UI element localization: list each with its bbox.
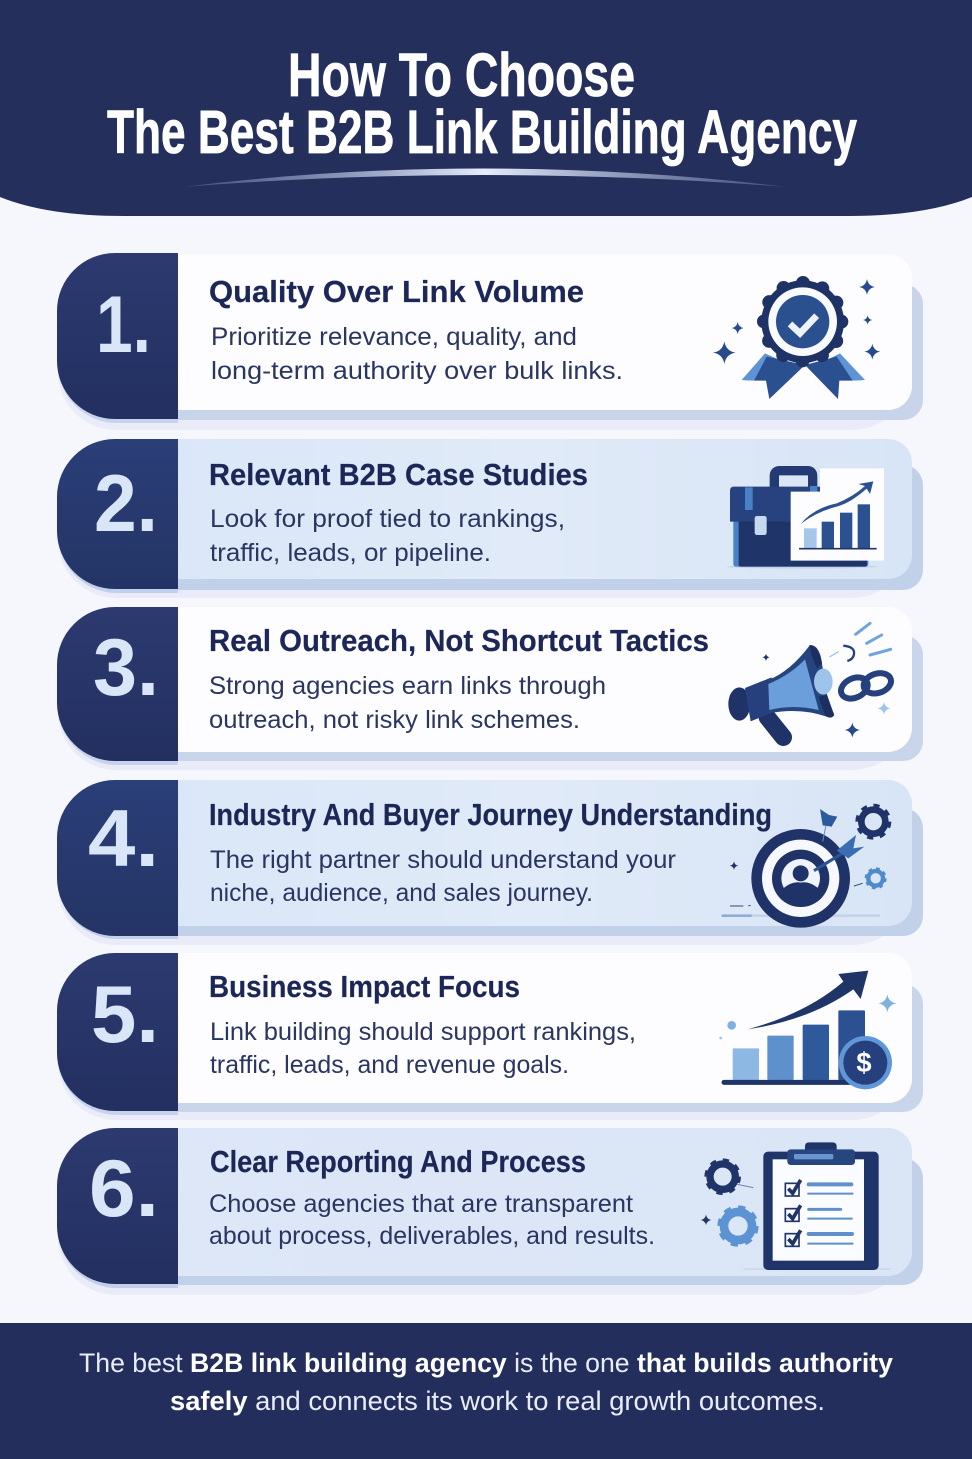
card 1 heading: Quality Over Link Volume: [209, 274, 584, 309]
card 4 description: [210, 846, 676, 907]
title swoosh: [183, 168, 787, 187]
card 4 description: niche, audience, and sales journey.: [210, 879, 593, 907]
card 2 description: [210, 505, 565, 567]
card 4 number: 4.: [88, 794, 159, 884]
card 5 background: [57, 953, 923, 1120]
card 3 description: [209, 672, 606, 734]
title: [107, 41, 857, 166]
card 6 background: [57, 1128, 923, 1295]
footer banner: [0, 1323, 972, 1459]
card 5: [57, 953, 923, 1120]
icon: clipboard checklist and gears: [701, 1142, 891, 1270]
footer text: [79, 1348, 893, 1416]
card 6 heading: Clear Reporting And Process: [210, 1144, 586, 1179]
card 4: [57, 780, 923, 945]
card 1 description: long-term authority over bulk links.: [211, 357, 623, 385]
footer text: safely and connects its work to real growth outcomes.: [170, 1386, 825, 1416]
card 5 description: traffic, leads, and revenue goals.: [210, 1051, 569, 1079]
icon: briefcase with chart: [727, 468, 884, 569]
card 6 description: about process, deliverables, and results.: [209, 1222, 655, 1250]
card 4 description: The right partner should understand your: [210, 846, 676, 874]
card 2 description: traffic, leads, or pipeline.: [210, 539, 491, 567]
card 2 heading: Relevant B2B Case Studies: [209, 457, 588, 492]
title: How To Choose: [288, 41, 635, 109]
card 2 number: 2.: [94, 459, 158, 549]
card 3 heading: Real Outreach, Not Shortcut Tactics: [209, 623, 709, 658]
card 2 description: Look for proof tied to rankings,: [210, 505, 565, 533]
header banner: [0, 0, 972, 216]
card 5 heading: Business Impact Focus: [209, 969, 520, 1004]
card 1: [57, 253, 923, 430]
card 3: [57, 607, 923, 770]
card 4 background: [57, 780, 923, 945]
card 5 number: 5.: [91, 970, 159, 1060]
card 1 background: [57, 253, 923, 430]
card 1 description: [211, 323, 623, 385]
card 2 background: [57, 439, 923, 598]
card 2: [57, 439, 923, 598]
card 6 description: [209, 1190, 655, 1250]
card 6 number: 6.: [89, 1144, 159, 1234]
card 4 heading: Industry And Buyer Journey Understanding: [209, 797, 772, 832]
card 3 number: 3.: [93, 623, 159, 713]
icon: growth chart with dollar coin: $: [856, 1047, 872, 1078]
card 3 description: Strong agencies earn links through: [209, 672, 606, 700]
card 6 description: Choose agencies that are transparent: [209, 1190, 633, 1218]
icon: megaphone and chain link: [728, 623, 894, 738]
card 5 description: Link building should support rankings,: [210, 1018, 636, 1046]
card 5 description: [210, 1018, 636, 1079]
icon: target with arrow and gears: [722, 806, 889, 928]
card 6: [57, 1128, 923, 1295]
icon: award rosette: [713, 279, 880, 399]
footer text: The best B2B link building agency is the one that builds authority: [79, 1348, 893, 1378]
card 3 background: [57, 607, 923, 770]
icon: growth chart with dollar coin: [719, 971, 896, 1089]
card 1 description: Prioritize relevance, quality, and: [211, 323, 577, 351]
card 1 number: 1.: [96, 280, 151, 370]
card 3 description: outreach, not risky link schemes.: [209, 706, 580, 734]
